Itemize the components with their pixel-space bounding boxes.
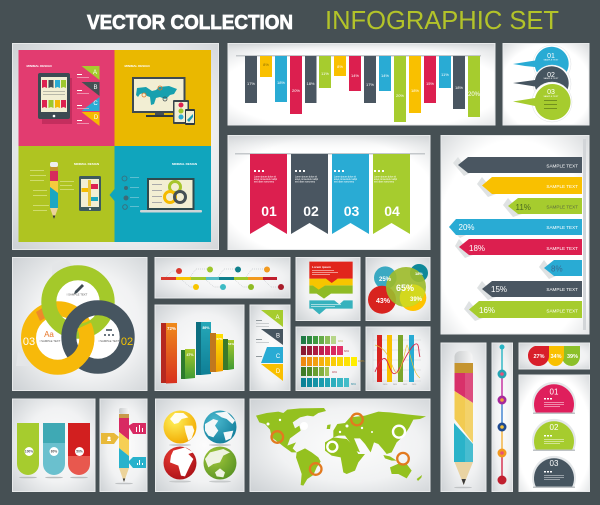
bubble 18% — [410, 264, 428, 282]
pencil eraser — [454, 351, 472, 363]
arrow: lime 16%: SAMPLE TEXT — [546, 308, 578, 314]
label: Aa: Aa — [44, 330, 54, 339]
bar value labels: 8% — [263, 62, 269, 67]
bar value labels: 8% — [337, 64, 343, 69]
map: orange markers — [272, 414, 409, 475]
panel: tag labels — [12, 399, 95, 492]
panel: horizontal timeline — [155, 258, 290, 298]
arrow: red 18%: SAMPLE TEXT — [546, 246, 578, 251]
timeline nodes — [498, 344, 506, 484]
bubble 03: SAMPLE TEXT — [543, 95, 559, 98]
bar 54%: 54% — [228, 342, 234, 346]
timeline segments — [501, 347, 503, 480]
text: sample text top: I SAMPLE TEXT — [67, 292, 88, 296]
panel: globes — [156, 399, 244, 492]
quadrant: yellow devices — [114, 50, 211, 152]
panel: arrow labels — [441, 136, 589, 334]
arrow: slate 15% — [482, 281, 582, 297]
panel: line and bar chart — [366, 327, 430, 390]
bubble values: 43% — [376, 298, 391, 305]
bubble 02: 02 — [547, 72, 555, 79]
ribbon 02: 02 — [303, 203, 319, 219]
tab: hierarchy — [128, 457, 146, 468]
bar value labels: 20% — [292, 88, 300, 93]
bar row red: 60% — [344, 350, 350, 353]
panel: horizontal stacked bars — [296, 327, 365, 390]
pencil — [115, 408, 133, 484]
number 03: 03 — [23, 336, 35, 348]
ribbon 04: 04 — [384, 203, 400, 219]
tab icons — [107, 425, 143, 465]
quadrant: teal laptop — [114, 146, 211, 242]
bubble 43% — [368, 286, 396, 314]
arrow: blue 8% — [544, 260, 582, 276]
arrow: slate — [458, 157, 582, 173]
panel: hanging bar chart — [228, 44, 495, 125]
icon: pen — [74, 284, 84, 294]
ribbon 04 — [373, 154, 410, 234]
panel: ribbons 01-04 — [228, 136, 430, 250]
bubble values: 25% — [379, 277, 392, 283]
arrow: blue 20% — [449, 219, 582, 235]
ribbon 04: amet consectetur adipi — [374, 178, 398, 181]
bubble 01: SAMPLE TEXT — [543, 58, 559, 62]
title: infographic set: INFOGRAPHIC SET — [325, 5, 559, 35]
globe: red — [164, 446, 196, 482]
panel: small pencil with tabs — [100, 399, 147, 492]
bar value labels: 20% — [396, 93, 404, 98]
bubble 03 — [513, 82, 572, 122]
ribbon 03 — [332, 154, 369, 234]
arrow: blue 20%: 20% — [458, 223, 475, 232]
bar value labels: 18% — [455, 85, 463, 90]
bar value labels: 17% — [247, 81, 255, 86]
pencil ferrule — [454, 363, 473, 373]
panel: world map — [250, 399, 430, 492]
bubble values: 65% — [396, 283, 414, 293]
tab: person — [101, 433, 119, 444]
globe: green — [204, 446, 236, 482]
arrow: slate 15%: 15% — [491, 285, 507, 294]
circle 01: 01 — [550, 388, 559, 396]
bubble 25% — [374, 266, 397, 289]
text: sample text right: I SAMPLE TEXT — [99, 339, 120, 343]
circle 02: 02 — [550, 423, 559, 432]
bar row teal: 80% — [351, 383, 357, 386]
ring: slate — [69, 308, 127, 366]
bubble 03: 03 — [547, 89, 555, 96]
ring hole: white discs — [36, 280, 120, 360]
ribbon 01: sed diam nonummy — [254, 182, 275, 184]
panel: line and bar chart: 2012 — [403, 384, 408, 386]
quadrant: teal laptop: MINIMAL DESIGN — [172, 162, 197, 166]
ribbon 04: sed diam nonummy — [374, 182, 395, 184]
bar 89%: 89% — [202, 326, 210, 330]
arrow: lime 16%: 16% — [479, 306, 495, 315]
pencil cone — [454, 462, 473, 485]
quadrant: yellow devices: MINIMAL DESIGN — [124, 64, 150, 68]
ribbon 02 — [291, 154, 328, 234]
bubble values: 39% — [410, 297, 423, 303]
panel: line and bar chart: 2011 — [393, 384, 398, 386]
quadrant: lime pencil — [18, 146, 114, 242]
ribbon 01: 01 — [261, 203, 277, 219]
bubble 02 — [513, 65, 571, 103]
bar value labels: 18% — [277, 80, 285, 85]
bar value labels: 14% — [351, 73, 359, 78]
arrow shadows — [449, 157, 556, 321]
arrow: lime 11%: 11% — [516, 203, 531, 212]
tag 50%: 50% — [76, 450, 83, 454]
circle 03: 03 — [550, 459, 559, 468]
arrow: lime 11%: SAMPLE TEXT — [546, 204, 578, 210]
tag 100%: 100% — [25, 450, 33, 454]
bar value labels: 11% — [321, 71, 329, 76]
panel: stacked speech banners: Lorem ipsum — [312, 265, 331, 269]
bubble overlap — [400, 284, 426, 307]
tag 80%: 80% — [51, 450, 57, 454]
quadrant: pink tablet: C — [93, 101, 98, 107]
ribbon 02: Lorem ipsum dolor sit — [295, 176, 317, 178]
text: sample text left: I SAMPLE TEXT — [40, 339, 61, 343]
panel: ABCD triangles — [250, 305, 290, 390]
bubble values: 18% — [415, 271, 423, 276]
ring shadow: orange — [36, 307, 47, 321]
panel: ABCD triangles: C — [276, 354, 281, 360]
panel: minimal design quad — [12, 44, 218, 250]
pencil facet highlight — [465, 373, 473, 462]
arrow: slate 15%: SAMPLE TEXT — [546, 287, 578, 292]
ribbon 03: Lorem ipsum dolor sit — [334, 176, 356, 178]
quadrant: pink tablet: MINIMAL DESIGN — [26, 64, 52, 68]
pencil blue section — [454, 423, 473, 462]
arrow: lime 11% — [508, 198, 582, 214]
bubble 65% — [386, 267, 426, 307]
panel: numbered circles — [519, 375, 590, 492]
bar value labels: 14% — [381, 73, 389, 78]
bubble 39% — [400, 284, 426, 311]
quadrant: lime pencil: MINIMAL DESIGN — [74, 162, 99, 166]
ribbon 02: amet consectetur adipi — [295, 178, 319, 181]
arrow: yellow: SAMPLE TEXT — [546, 184, 578, 189]
tag 34%: 34% — [550, 354, 562, 360]
panel: percentage tags — [519, 343, 590, 369]
tag 27%: 27% — [533, 354, 545, 360]
panel: stacked speech banners — [296, 258, 360, 320]
panel: ABCD triangles: B — [276, 334, 280, 340]
number 02: 02 — [121, 336, 133, 348]
arrow: yellow — [482, 177, 582, 194]
panel: venn bubbles — [366, 258, 430, 320]
bubble 01 — [513, 45, 571, 83]
bar value labels: 18% — [306, 81, 315, 86]
tab: chart — [128, 423, 146, 434]
bubble values — [376, 271, 423, 305]
pencil pink section — [454, 373, 473, 403]
title: vector collection: VECTOR COLLECTION — [87, 11, 293, 34]
panel: ABCD triangles: D — [276, 369, 281, 375]
quadrant: pink tablet: D — [94, 115, 99, 121]
pencil tip — [462, 479, 466, 485]
panel: ABCD triangles: A — [275, 315, 280, 321]
bar value labels: 11% — [441, 72, 449, 77]
bar row green: 40% — [338, 340, 344, 343]
quadrant: pink tablet — [18, 50, 120, 146]
map: lakes — [266, 419, 373, 433]
ribbon 01: Lorem ipsum dolor sit — [254, 176, 276, 178]
bar value labels: 18% — [411, 88, 419, 93]
arrow: red 18%: 18% — [469, 244, 485, 253]
bar yellow: 67% — [216, 337, 223, 341]
ribbon 02: sed diam nonummy — [295, 182, 316, 184]
arrow: blue 20%: SAMPLE TEXT — [546, 225, 578, 230]
map: white markers — [327, 426, 405, 452]
bar value labels: 20% — [468, 92, 481, 98]
ring weave: yellow over slate — [68, 326, 87, 365]
arrow: red 18% — [459, 239, 582, 255]
panel: 3D bar chart — [155, 305, 244, 390]
bar value labels: 15% — [426, 81, 434, 86]
globe: yellow — [164, 410, 196, 446]
arrow: lime 16% — [469, 301, 582, 318]
globe: blue — [204, 410, 236, 446]
bar value labels: 17% — [366, 82, 374, 87]
quadrant: pink tablet: B — [93, 85, 98, 91]
panel: vertical timeline — [492, 343, 512, 492]
ring: lime — [49, 273, 107, 331]
arrow: slate: SAMPLE TEXT — [546, 164, 578, 168]
arrow: blue 8%: 8% — [551, 264, 563, 274]
ribbon 01: amet consectetur adipi — [254, 178, 278, 181]
bar row olive: 40% — [332, 371, 338, 374]
bar 72%: 72% — [167, 326, 176, 331]
ribbon 01 — [250, 154, 287, 234]
bar value labels — [247, 62, 481, 98]
panel: large pencil — [441, 343, 486, 492]
bubble 01: 01 — [547, 53, 555, 60]
bar 47%: 47% — [186, 353, 194, 357]
quadrant: pink tablet: A — [93, 70, 97, 76]
panel: interlocking rings — [12, 258, 147, 390]
ribbon 03: amet consectetur adipi — [334, 178, 358, 181]
ring: yellow — [28, 309, 87, 367]
panel: line and bar chart: 2010 — [383, 384, 388, 386]
icon: hierarchy — [104, 329, 114, 336]
tag 39%: 39% — [567, 354, 578, 360]
bubble 02: SAMPLE TEXT — [543, 77, 559, 80]
panel: line and bar chart: 2013 — [412, 384, 417, 386]
pencil yellow section — [454, 391, 473, 443]
bar row orange: 100% — [358, 360, 365, 363]
panel: speech bubbles — [503, 44, 589, 125]
ribbon 03: sed diam nonummy — [334, 182, 355, 184]
map: continents — [256, 408, 426, 486]
ribbon 03: 03 — [344, 203, 359, 219]
ribbon 04: Lorem ipsum dolor sit — [374, 176, 396, 178]
